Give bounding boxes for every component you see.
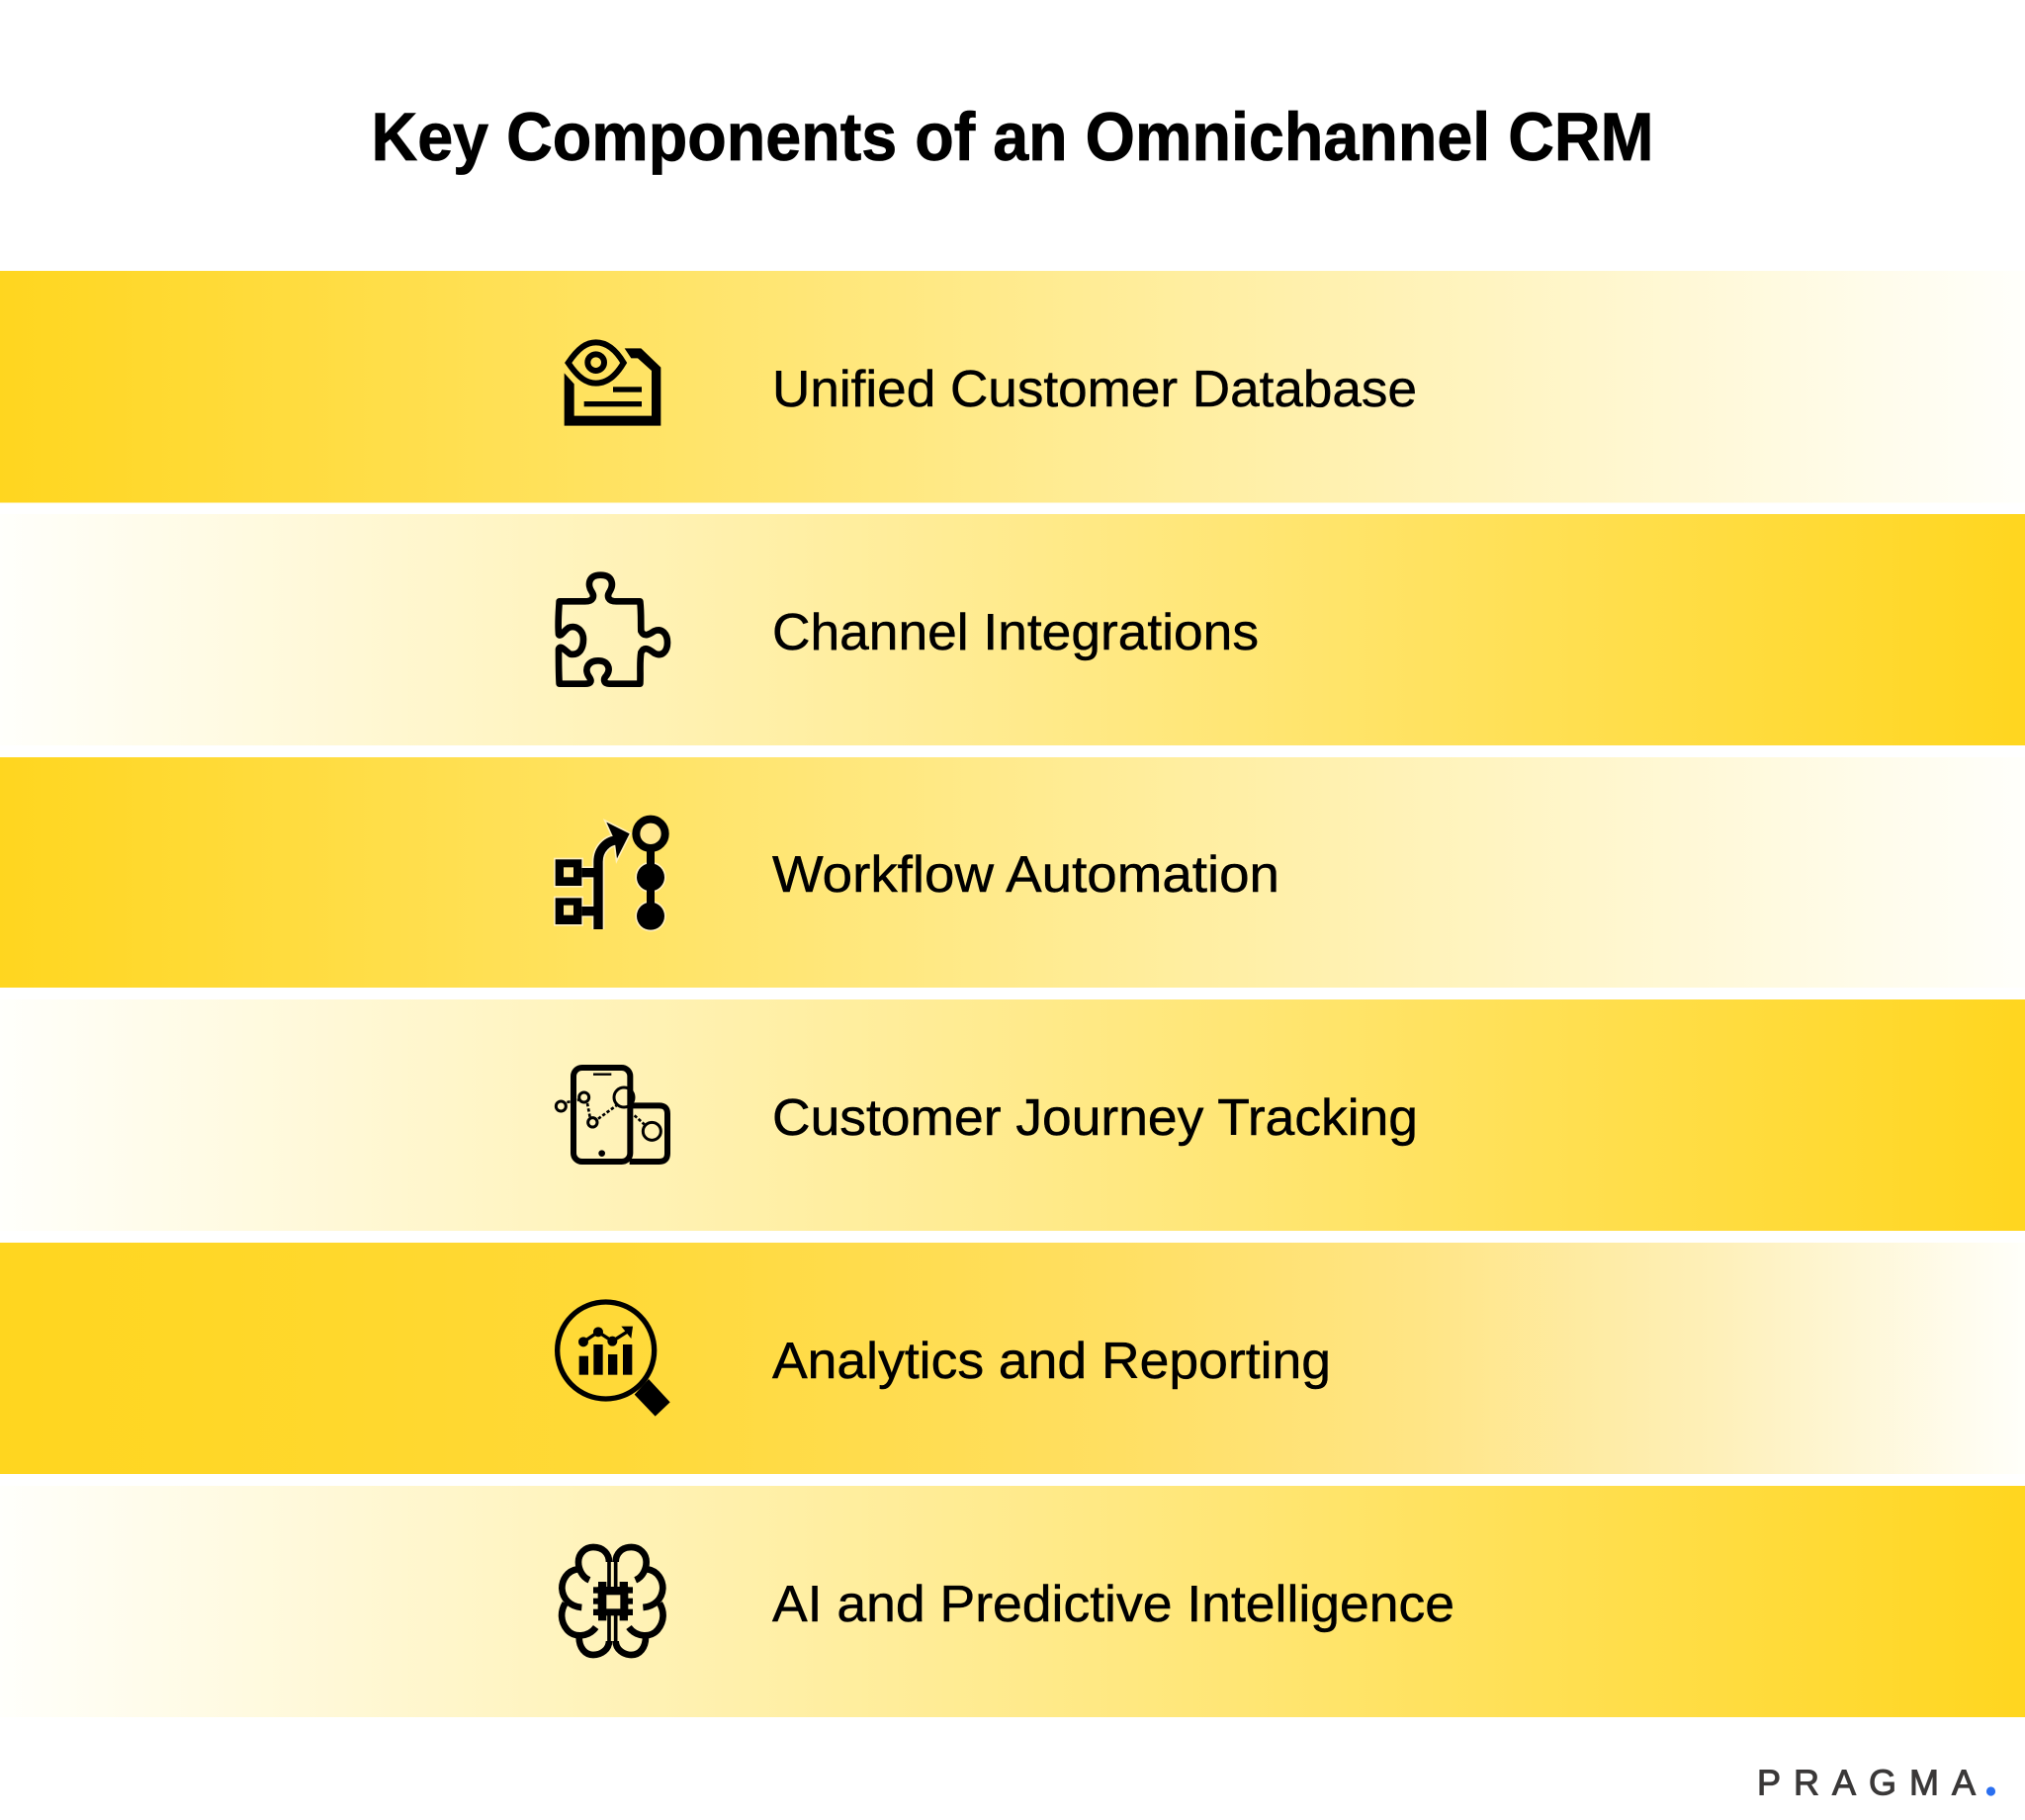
- title: Key Components of an Omnichannel CRM: [372, 99, 1653, 175]
- panel: Workflow Automation: [0, 757, 2025, 988]
- panel: AI and Predictive Intelligence: [0, 1486, 2025, 1717]
- label: Analytics and Reporting: [772, 1333, 1331, 1390]
- label: Unified Customer Database: [772, 361, 1417, 418]
- logo dot: [1986, 1786, 1995, 1796]
- icon: phones with journey path: [556, 1068, 667, 1162]
- icon: puzzle piece: [559, 575, 667, 684]
- icon: document with eye: [565, 342, 660, 426]
- panel: Unified Customer Database: [0, 271, 2025, 502]
- band background: [0, 1243, 2025, 1474]
- icon: brain with chip: [562, 1547, 663, 1655]
- label: Channel Integrations: [772, 604, 1259, 661]
- label: AI and Predictive Intelligence: [772, 1576, 1454, 1633]
- panel: Customer Journey Tracking: [0, 999, 2025, 1231]
- band background: [0, 514, 2025, 745]
- label: Workflow Automation: [772, 846, 1279, 904]
- band background: [0, 1486, 2025, 1717]
- icon: workflow: [556, 818, 667, 930]
- logo: PRAGMA: PRAGMA: [1757, 1762, 1976, 1803]
- panel: Analytics and Reporting: [0, 1243, 2025, 1474]
- band background: [0, 757, 2025, 988]
- band background: [0, 271, 2025, 502]
- icon: magnifier with chart: [558, 1302, 670, 1417]
- label: Customer Journey Tracking: [772, 1089, 1418, 1147]
- panel: Channel Integrations: [0, 514, 2025, 745]
- band background: [0, 999, 2025, 1231]
